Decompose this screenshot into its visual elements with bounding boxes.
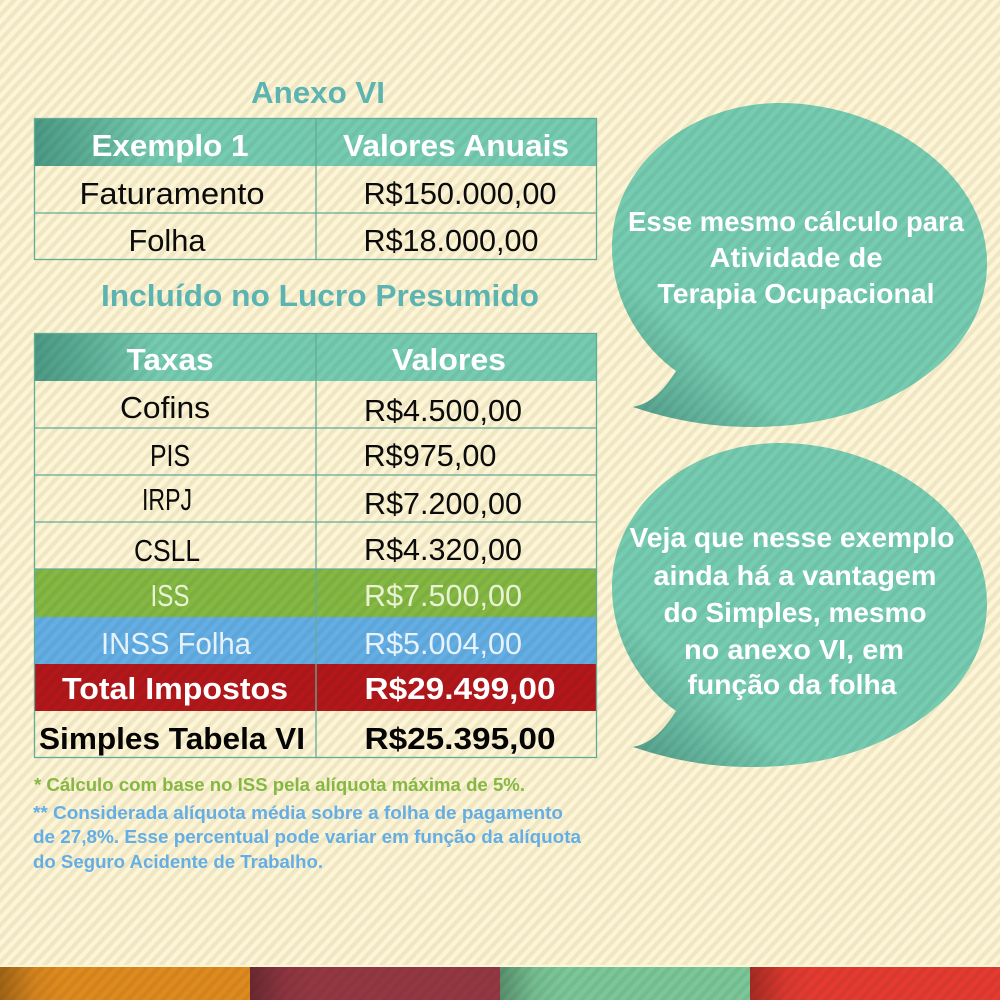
- coloured rows: [34, 569, 597, 711]
- table header row: Valores Anuais: [343, 128, 569, 163]
- row: Cofins: [120, 390, 522, 428]
- speech bubble 2: função da folha: [688, 669, 897, 700]
- row: Simples Tabela VI: R$25.395,00: [364, 721, 556, 756]
- footnote: INSS: do Seguro Acidente de Trabalho.: [33, 852, 323, 872]
- row: INSS Folha: INSS Folha: [101, 626, 252, 661]
- row: INSS Folha: [101, 626, 522, 661]
- speech bubble 2: no anexo VI, em: [684, 634, 904, 665]
- footnote: INSS: de 27,8%. Esse percentual pode variar em função da alíquota: [33, 827, 582, 847]
- speech bubble 1: [612, 103, 987, 427]
- footnote: ISS: * Cálculo com base no ISS pela alíquota máxima de 5%.: [34, 775, 525, 795]
- row: Faturamento: R$150.000,00: [364, 176, 556, 211]
- row: Cofins: Cofins: [120, 390, 210, 425]
- row: IRPJ: IRPJ: [142, 482, 192, 517]
- row: Cofins: R$4.500,00: [364, 393, 522, 428]
- row: Folha: R$18.000,00: [364, 223, 538, 258]
- footnote: INSS: ** Considerada alíquota média sobre a folha de pagamento: [33, 803, 563, 823]
- row: Faturamento: Faturamento: [80, 176, 264, 211]
- speech bubble 2: do Simples, mesmo: [664, 597, 926, 628]
- table grid: [34, 333, 597, 758]
- row: Folha: Folha: [128, 223, 206, 258]
- row: ISS: R$7.500,00: [364, 578, 522, 613]
- bottom colour bar: [0, 967, 1000, 1000]
- table header row: [34, 118, 597, 166]
- row: IRPJ: [142, 482, 522, 521]
- speech bubble 1: Terapia Ocupacional: [658, 278, 934, 309]
- table: Taxas: [34, 333, 597, 758]
- heading: Anexo VI: Anexo VI: [251, 75, 385, 110]
- row: Folha: [128, 223, 538, 258]
- row: Faturamento: [80, 176, 556, 211]
- speech bubble 2: Veja que nesse exemplo: [630, 522, 954, 553]
- row: PIS: [150, 438, 496, 473]
- speech bubble 1: Esse mesmo cálculo para: [628, 206, 964, 237]
- row: PIS: PIS: [150, 438, 190, 473]
- table header row: Taxas: [126, 342, 214, 377]
- speech bubble 2: [612, 443, 987, 767]
- speech bubble 1: Atividade de: [710, 242, 882, 273]
- row: ISS: [150, 578, 522, 613]
- table header row: Exemplo 1: [92, 128, 248, 163]
- speech bubble 2: ainda há a vantagem: [654, 560, 936, 591]
- table: Exemplo 1: [34, 118, 597, 260]
- footnote: INSS: [33, 803, 582, 872]
- row: Simples Tabela VI: Simples Tabela VI: [39, 721, 305, 756]
- row: CSLL: CSLL: [134, 533, 200, 568]
- row: Simples Tabela VI: [39, 721, 556, 756]
- row: Total Impostos: Total Impostos: [62, 671, 288, 706]
- table header row: Valores: [392, 342, 506, 377]
- row: CSLL: R$4.320,00: [364, 532, 522, 567]
- row: ISS: ISS: [150, 578, 190, 613]
- row: IRPJ: R$7.200,00: [364, 486, 522, 521]
- row: Total Impostos: [62, 671, 556, 706]
- table grid: [34, 118, 597, 260]
- table header row: [34, 333, 597, 381]
- row: INSS Folha: R$5.004,00: [364, 626, 522, 661]
- row: PIS: R$975,00: [364, 438, 496, 473]
- heading: Incluído no Lucro Presumido: Incluído no Lucro Presumido: [101, 278, 539, 313]
- row: CSLL: [134, 532, 522, 568]
- row: Total Impostos: R$29.499,00: [364, 671, 556, 706]
